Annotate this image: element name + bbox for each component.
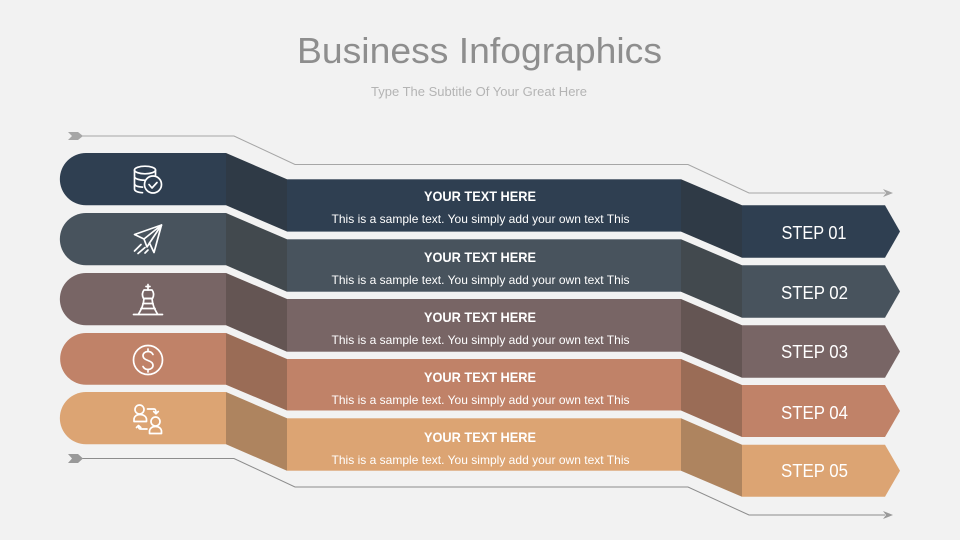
step label 5: STEP 05 xyxy=(781,461,848,481)
icon: chess king xyxy=(134,284,162,314)
step 4 arrow xyxy=(742,385,900,437)
step 3 arrow xyxy=(742,325,900,378)
step label 2: STEP 02 xyxy=(781,283,848,303)
middle bar 4 xyxy=(287,359,681,410)
row 5 band xyxy=(60,392,900,497)
text block 4: YOUR TEXT HERE xyxy=(424,369,536,385)
step 1 arrow xyxy=(742,205,900,258)
step 5 arrow xyxy=(742,445,900,497)
fold 5 left xyxy=(226,392,287,471)
middle bar 5 xyxy=(287,418,681,471)
step label 3: STEP 03 xyxy=(781,342,848,362)
bottom arrow line xyxy=(68,454,893,519)
fold 4 right xyxy=(681,359,742,437)
text block 4 xyxy=(332,369,630,407)
text block 1: YOUR TEXT HERE xyxy=(424,188,536,204)
step label 4: STEP 04 xyxy=(781,403,848,423)
row 1 band xyxy=(60,153,900,258)
fold 3 right xyxy=(681,299,742,378)
middle bar 3 xyxy=(287,299,681,352)
text block 1: This is a sample text. You simply add your own text This xyxy=(332,212,630,226)
row 4 band xyxy=(60,333,900,437)
text block 5: YOUR TEXT HERE xyxy=(424,429,536,445)
text block 4: This is a sample text. You simply add your own text This xyxy=(332,393,630,407)
text block 2 xyxy=(332,249,630,287)
icon: people exchange xyxy=(134,405,162,434)
text block 2: YOUR TEXT HERE xyxy=(424,249,536,265)
fold 2 right xyxy=(681,239,742,318)
row 2 band xyxy=(60,213,900,318)
fold 3 left xyxy=(226,273,287,352)
pill 1 xyxy=(60,153,226,205)
text block 2: This is a sample text. You simply add your own text This xyxy=(332,273,630,287)
middle bar 2 xyxy=(287,239,681,292)
pill 3 xyxy=(60,273,226,325)
icon: paper plane xyxy=(134,225,162,254)
text block 5 xyxy=(332,429,630,467)
step 2 arrow xyxy=(742,265,900,318)
pill 2 xyxy=(60,213,226,265)
fold 1 right xyxy=(681,179,742,258)
step label 1: STEP 01 xyxy=(782,223,846,243)
fold 5 right xyxy=(681,418,742,497)
icon: dollar coin xyxy=(134,346,162,374)
fold 4 left xyxy=(226,333,287,410)
text block 3: This is a sample text. You simply add your own text This xyxy=(332,333,630,347)
icon: database with check xyxy=(134,166,162,193)
text block 5: This is a sample text. You simply add your own text This xyxy=(332,453,630,467)
fold 2 left xyxy=(226,213,287,292)
top arrow line xyxy=(68,132,893,197)
text block 3: YOUR TEXT HERE xyxy=(424,309,536,325)
row 3 band xyxy=(60,273,900,378)
fold 1 left xyxy=(226,153,287,232)
text block 3 xyxy=(332,309,630,347)
pill 4 xyxy=(60,333,226,385)
subtitle: Type The Subtitle Of Your Great Here xyxy=(371,84,587,99)
text block 1 xyxy=(332,188,630,226)
title: Business Infographics xyxy=(297,30,662,71)
pill 5 xyxy=(60,392,226,444)
middle bar 1 xyxy=(287,179,681,232)
